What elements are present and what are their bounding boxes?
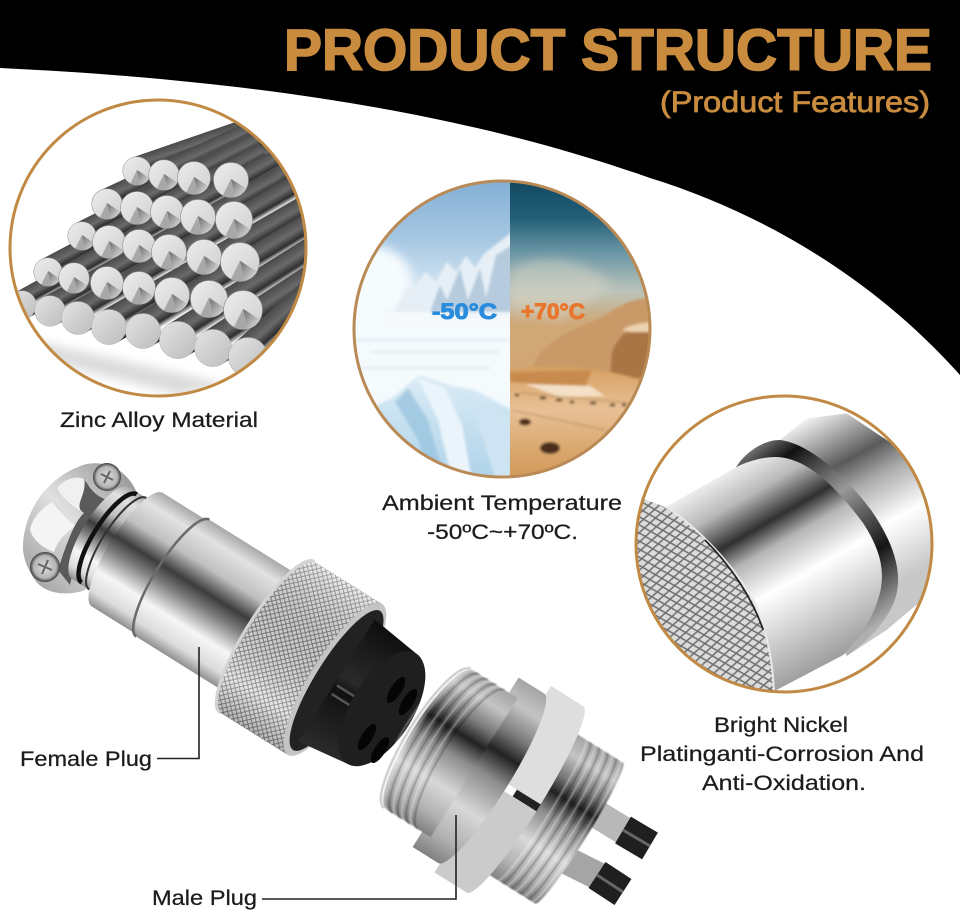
panel: zinc alloy rods circle bbox=[8, 98, 308, 398]
black insert with sockets bbox=[298, 619, 447, 787]
connector head with screws bbox=[23, 463, 137, 593]
panel: temperature circle bbox=[352, 180, 652, 478]
female plug connector bbox=[23, 448, 456, 801]
callout: male plug bbox=[152, 815, 456, 910]
rod end faces bbox=[8, 157, 267, 376]
barrel bbox=[665, 457, 882, 692]
temperature values bbox=[432, 303, 585, 320]
label: ambient temperature: -50ºC~+70ºC. bbox=[427, 521, 578, 544]
front thread bbox=[363, 656, 518, 837]
hot half bbox=[510, 182, 648, 476]
rod shafts bbox=[18, 122, 304, 364]
male plug connector bbox=[348, 632, 650, 916]
knurled coupling ring bbox=[201, 550, 402, 768]
callout: female plug: Female Plug bbox=[20, 748, 152, 771]
label: ambient temperature: Ambient Temperature bbox=[382, 492, 622, 515]
temperature values: -50°C bbox=[432, 299, 497, 324]
hex nut bbox=[434, 686, 597, 901]
rear thread bbox=[488, 733, 630, 908]
callout: male plug: Male Plug bbox=[152, 887, 257, 910]
label: nickel plating: Anti-Oxidation. bbox=[702, 772, 866, 795]
label: nickel plating bbox=[640, 714, 924, 795]
panel: nickel plating closeup circle bbox=[630, 396, 950, 700]
temperature values: +70°C bbox=[521, 299, 585, 324]
cold half bbox=[356, 182, 510, 476]
callout: female plug bbox=[20, 647, 199, 771]
label: ambient temperature bbox=[382, 492, 622, 544]
dark ring band bbox=[736, 440, 898, 656]
floor shadow bbox=[44, 339, 220, 394]
barrel bbox=[123, 511, 312, 701]
pins bbox=[558, 810, 650, 892]
subtitle: (Product Features) bbox=[660, 86, 930, 119]
rear collar bbox=[780, 414, 930, 656]
collar bbox=[76, 483, 213, 638]
flange washer bbox=[413, 677, 559, 872]
socket holes bbox=[354, 674, 421, 766]
label: nickel plating: Bright Nickel bbox=[714, 714, 848, 737]
title: PRODUCT STRUCTURE bbox=[284, 18, 932, 83]
label: zinc alloy material: Zinc Alloy Material bbox=[60, 409, 258, 432]
knurled end bbox=[638, 500, 773, 690]
black header background bbox=[0, 0, 960, 375]
neck with grooves bbox=[57, 478, 160, 598]
label: nickel plating: Platinganti-Corrosion And bbox=[640, 743, 924, 766]
